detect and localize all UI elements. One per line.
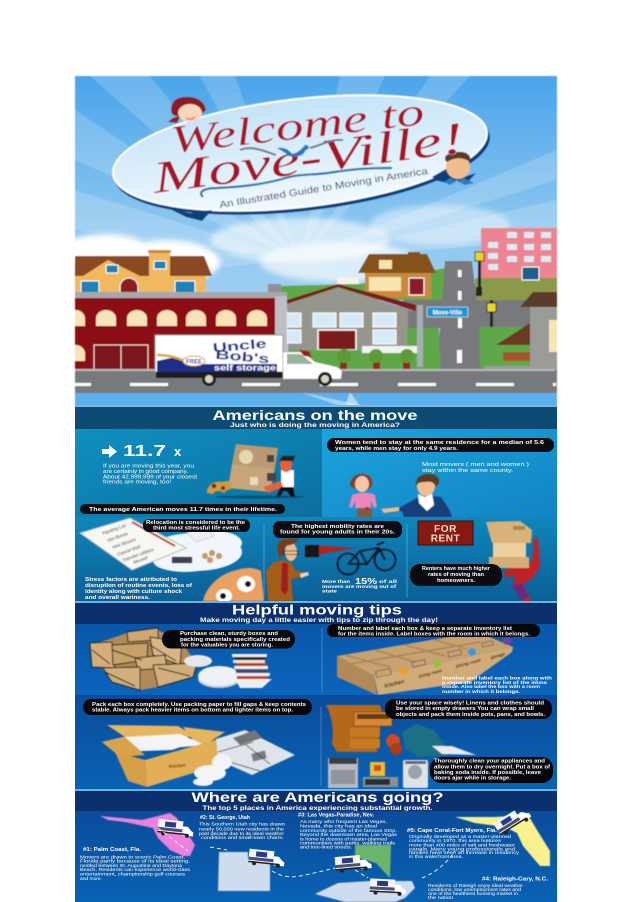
body text: friends are moving, too! bbox=[103, 480, 171, 486]
header band bbox=[75, 405, 557, 429]
callout pill bbox=[273, 521, 402, 538]
body text: Number and label each box along with bbox=[442, 675, 553, 680]
illustration: open box: Kitchen bbox=[169, 763, 186, 769]
body text bbox=[85, 577, 192, 601]
Uncle Bob's moving truck: self storage bbox=[214, 364, 277, 372]
text: Las Vegas: communities with parks, walking trails bbox=[300, 840, 395, 846]
body text: a separate inventory list of the items bbox=[442, 680, 548, 685]
callout pill: allow them to dry overnight. Put a box of bbox=[434, 764, 550, 770]
illustration: plates bbox=[184, 655, 240, 688]
text: St. George: This Southern Utah city has drawn bbox=[199, 822, 286, 826]
clouds bbox=[60, 205, 510, 284]
checklist paper: Hire Movers bbox=[112, 537, 137, 550]
pink apartment building bbox=[475, 228, 557, 300]
illustration: student bbox=[266, 539, 309, 601]
text: Palm Coast bbox=[80, 847, 190, 881]
map: Florida yellow bbox=[455, 815, 550, 866]
text: Raleigh: conditions, low unemployment rates and bbox=[428, 887, 522, 892]
right corner house bbox=[480, 292, 557, 371]
illustration: bubble wrap bbox=[193, 754, 232, 786]
header band: Americans on the move bbox=[212, 407, 418, 423]
body text: are certainly in good company. bbox=[103, 469, 188, 475]
vertical side road bbox=[403, 261, 557, 372]
text: Cape Coral bbox=[407, 828, 520, 859]
callout pill bbox=[385, 699, 552, 719]
illustration: long labelled box: garage bbox=[489, 651, 506, 660]
callout pill: be stored in empty drawers You can wrap small bbox=[396, 706, 535, 712]
text: Raleigh: one of the healthiest housing market in bbox=[428, 891, 519, 896]
stat: 11.7x: 11.7 bbox=[123, 443, 166, 460]
callout pill: Purchase clean, sturdy boxes and bbox=[180, 631, 278, 637]
truck icon bbox=[369, 878, 406, 896]
callout pill bbox=[327, 624, 540, 638]
dashed route lines bbox=[158, 828, 455, 878]
illustration: long labelled box: dining room bbox=[455, 657, 481, 669]
truck icon bbox=[335, 854, 372, 873]
callout pill bbox=[327, 438, 554, 452]
callout pill bbox=[143, 519, 250, 532]
text: Las Vegas: Beyond the downtown area, Las Vegas bbox=[300, 832, 397, 837]
illustration: long labelled box: living room bbox=[418, 668, 443, 679]
divider bbox=[406, 524, 408, 598]
brown house back bbox=[337, 252, 436, 298]
body text: inside. Also label the box with a room bbox=[442, 684, 540, 689]
text: Raleigh: #4: Raleigh-Cary, N.C. bbox=[482, 876, 549, 882]
text: St. George: nearly 50,000 new residents in the bbox=[199, 826, 285, 832]
body text: If you are moving this year, you bbox=[103, 464, 194, 470]
callout pill: Number and label each box & keep a separate inventory list bbox=[338, 626, 512, 632]
illustration: newspapers bbox=[216, 730, 295, 775]
checklist paper: Moved! bbox=[133, 555, 149, 565]
divider bbox=[263, 524, 265, 598]
callout pill: objects and pack them inside pots, pans, and bowls. bbox=[396, 712, 546, 718]
panel: renters bbox=[410, 521, 540, 603]
text: Las Vegas: community outside of the famous Strip. bbox=[300, 828, 397, 833]
sign: for rent: FOR bbox=[434, 524, 457, 535]
callout pill: years, while men stay for only 4.9 years. bbox=[335, 446, 459, 452]
map: North Carolina bbox=[315, 881, 415, 902]
text: Raleigh bbox=[428, 876, 549, 900]
truck icon bbox=[493, 805, 532, 837]
illustration: pennant bbox=[305, 545, 355, 557]
header band bbox=[75, 601, 557, 624]
text: Las Vegas bbox=[298, 812, 397, 850]
illustration: long labelled box bbox=[337, 632, 513, 695]
callout pill: found for young adults in their 20s. bbox=[280, 530, 396, 536]
text: St. George: conditions and small-town charm. bbox=[201, 835, 284, 840]
callout pill: rates of moving than bbox=[428, 572, 484, 578]
text: Las Vegas: is home to dozens of master-planned bbox=[300, 836, 388, 842]
header band: The top 5 places in America experiencing substantial growth. bbox=[202, 805, 433, 812]
text: Palm Coast: Beach. Residents can experience world-class bbox=[80, 867, 190, 872]
truck icon bbox=[157, 819, 194, 838]
Uncle Bob's moving truck bbox=[155, 335, 342, 386]
street sign: Move-Ville bbox=[433, 310, 463, 316]
grey house bbox=[287, 284, 440, 370]
callout pill bbox=[410, 564, 502, 586]
text: Raleigh: the nation. bbox=[428, 895, 455, 900]
divider bbox=[321, 628, 323, 692]
panel: tips row 1 bbox=[75, 624, 557, 695]
header band: Helpful moving tips bbox=[232, 602, 402, 618]
text: Palm Coast: entertainment, championship golf courses bbox=[80, 872, 185, 876]
subtitle: An Illustrated Guide to Moving in America bbox=[219, 166, 429, 211]
body text bbox=[442, 675, 553, 694]
callout pill bbox=[162, 630, 295, 648]
road bbox=[75, 369, 557, 393]
bird ornament bbox=[240, 140, 343, 156]
checklist paper: Get Boxes bbox=[107, 531, 129, 543]
stat text: 15% bbox=[355, 576, 378, 586]
text: Palm Coast: nestled between St. Augustine and Daytona bbox=[80, 863, 183, 868]
Uncle Bob's moving truck: Uncle bbox=[212, 336, 267, 355]
sky with sun rays bbox=[75, 76, 557, 406]
callout pill: Use your space wisely! Linens and clothes should bbox=[396, 700, 544, 706]
text: Las Vegas: and tree-lined streets. bbox=[300, 844, 352, 850]
map: Nevada bbox=[355, 845, 391, 878]
callout pill bbox=[80, 504, 285, 514]
body text: Most movers ( men and women ) bbox=[422, 462, 529, 468]
yellow house left bbox=[75, 250, 212, 294]
text: St. George bbox=[199, 815, 286, 840]
illustration: bicycle bbox=[338, 542, 396, 574]
header band bbox=[75, 789, 557, 812]
text: Palm Coast: Florida partly because of its ideal setting, bbox=[80, 858, 190, 864]
illustration: mover with boxes bbox=[486, 521, 540, 603]
illustration: man carrying boxes with dog bbox=[207, 444, 305, 498]
panel: 11.7 times bbox=[75, 429, 322, 517]
thought cloud bbox=[148, 530, 242, 572]
callout pill: The average American moves 11.7 times in their lifetime. bbox=[89, 507, 278, 513]
text: Cape Coral: families have seen an increase in residency bbox=[409, 850, 520, 855]
stat text: state bbox=[322, 588, 337, 594]
illustration: long labelled box: Kitchen bbox=[384, 679, 406, 690]
Uncle Bob's moving truck: Bob's bbox=[215, 347, 270, 366]
swirl ornament bbox=[201, 168, 392, 197]
callout pill: stable. Always pack heavier items on bottom and lighter items on top. bbox=[92, 708, 294, 714]
illustration: clothes and teddy bear bbox=[386, 724, 476, 757]
callout pill: Renters have much higher bbox=[422, 566, 490, 572]
title ellipse badge bbox=[107, 78, 496, 232]
sign: for rent: RENT bbox=[431, 534, 460, 544]
Uncle Bob's moving truck: FREE bbox=[186, 360, 202, 366]
title text bbox=[148, 90, 467, 203]
callout pill: doors ajar while in storage. bbox=[434, 775, 512, 781]
illustration: worried head bbox=[203, 568, 264, 603]
callout pill: Relocation is considered to be the bbox=[146, 520, 245, 526]
text: Cape Coral: canals. Many young professionals and bbox=[409, 846, 516, 852]
stat text: More than bbox=[322, 579, 350, 585]
panel: destinations bbox=[75, 811, 557, 902]
text: Palm Coast: and more. bbox=[80, 876, 102, 881]
street lamps bbox=[475, 252, 496, 360]
section: Where are Americans going bbox=[75, 789, 557, 902]
body text: identity along with culture shock bbox=[85, 589, 182, 595]
illustration: stack of boxes bbox=[90, 628, 197, 690]
text: Cape Coral: in this waterfront area. bbox=[409, 854, 463, 859]
text: Cape Coral: more than 400 miles of salt and freshwater bbox=[409, 842, 516, 848]
text: Las Vegas: As many who frequent Las Vegas, bbox=[300, 819, 387, 824]
callout pill: for the items inside. Label boxes with the room in which it belongs. bbox=[338, 632, 531, 638]
section: Americans on the move bbox=[75, 405, 557, 517]
body text bbox=[103, 464, 198, 486]
text: Palm Coast: #1: Palm Coast, Fla. bbox=[83, 847, 142, 853]
title text: Welcome to bbox=[168, 90, 426, 162]
back lawn bbox=[278, 268, 445, 300]
section: second row facts bbox=[75, 517, 557, 603]
callout pill bbox=[430, 757, 553, 783]
callout pill: Thoroughly clean your appliances and bbox=[434, 759, 545, 765]
panel: stress bbox=[80, 518, 264, 603]
text: St. George: past decade due to its ideal weather bbox=[199, 831, 285, 836]
red brick building bbox=[75, 284, 287, 370]
stat text: movers are moving out of bbox=[322, 584, 397, 590]
title text: Move-Ville! bbox=[148, 112, 467, 203]
illustration: man bbox=[381, 474, 452, 517]
sign: for rent bbox=[418, 521, 473, 545]
body text: number in which it belongs. bbox=[442, 689, 520, 694]
section: Helpful moving tips bbox=[75, 601, 557, 789]
callout pill: Women tend to stay at the same residence for a median of 5.6 bbox=[335, 440, 544, 446]
callout pill bbox=[83, 699, 312, 715]
text: Cape Coral: #5: Cape Coral-Fort Myers, Fla. bbox=[407, 828, 498, 834]
map: Utah bbox=[218, 852, 270, 891]
text: Palm Coast: Movers are drawn to scenic Palm Coast, bbox=[80, 854, 185, 860]
text: Cape Coral: Originally developed as a master-planned bbox=[409, 834, 512, 839]
divider bbox=[320, 707, 322, 786]
header band: Just who is doing the moving in America? bbox=[230, 422, 400, 429]
callout pill: Pack each box completely. Use packing paper to fill gaps & keep contents bbox=[92, 702, 306, 708]
header band: Make moving day a little easier with tips to zip through the day! bbox=[200, 617, 438, 624]
text: Las Vegas: Nevada, this city has an ideal bbox=[300, 824, 377, 828]
callout pill: packing materials specifically created bbox=[180, 637, 290, 643]
map: Florida pink bbox=[100, 813, 195, 856]
body text: About 42,999,999 of your closest bbox=[103, 474, 198, 480]
panel: tips row 2 bbox=[75, 695, 557, 789]
callout pill: for the valuables you are storing. bbox=[181, 642, 274, 648]
body text: stay within the same county. bbox=[422, 468, 514, 474]
body text bbox=[422, 462, 529, 474]
man head bbox=[444, 152, 474, 185]
panel: gender bbox=[322, 429, 557, 517]
truck icon bbox=[248, 849, 285, 868]
callout pill: third most stressful life event. bbox=[153, 526, 241, 532]
text: Las Vegas: #3: Las Vegas-Paradise, Nev. bbox=[298, 812, 375, 818]
body text: and overall wariness. bbox=[85, 595, 151, 601]
body text: Stress factors are attributed to bbox=[85, 577, 177, 583]
callout pill: homeowners. bbox=[437, 578, 476, 584]
checklist paper: Cancel Mail bbox=[117, 544, 142, 557]
text: St. George: #2: St. George, Utah bbox=[200, 815, 250, 821]
hero illustration bbox=[60, 76, 557, 406]
callout pill: The highest mobility rates are bbox=[291, 524, 384, 530]
stat suffix: x bbox=[174, 444, 182, 459]
icon: arrow bbox=[102, 445, 117, 458]
checklist paper: Packing List bbox=[102, 523, 127, 536]
callout pill: baking soda inside. If possible, leave bbox=[434, 770, 541, 776]
checklist paper: Transfer Utilities bbox=[122, 547, 155, 563]
illustration: books bbox=[232, 654, 272, 688]
panel: young adults bbox=[266, 521, 402, 601]
street sign bbox=[417, 305, 468, 367]
illustration: open box bbox=[102, 725, 225, 787]
text: Raleigh: Residents of Raleigh enjoy ideal weather bbox=[428, 883, 524, 888]
woman head bbox=[168, 97, 206, 123]
stat text: of all bbox=[379, 579, 397, 585]
header band: Where are Americans going? bbox=[192, 789, 444, 805]
illustration: appliances bbox=[328, 758, 428, 788]
stat text bbox=[322, 576, 397, 594]
text: Cape Coral: community in 1970, this area features bbox=[409, 838, 501, 843]
body text: disruption of routine events, loss of bbox=[85, 583, 192, 589]
illustration: woman bbox=[349, 474, 377, 517]
checklist paper bbox=[80, 518, 222, 570]
illustration: dresser bbox=[326, 705, 392, 752]
